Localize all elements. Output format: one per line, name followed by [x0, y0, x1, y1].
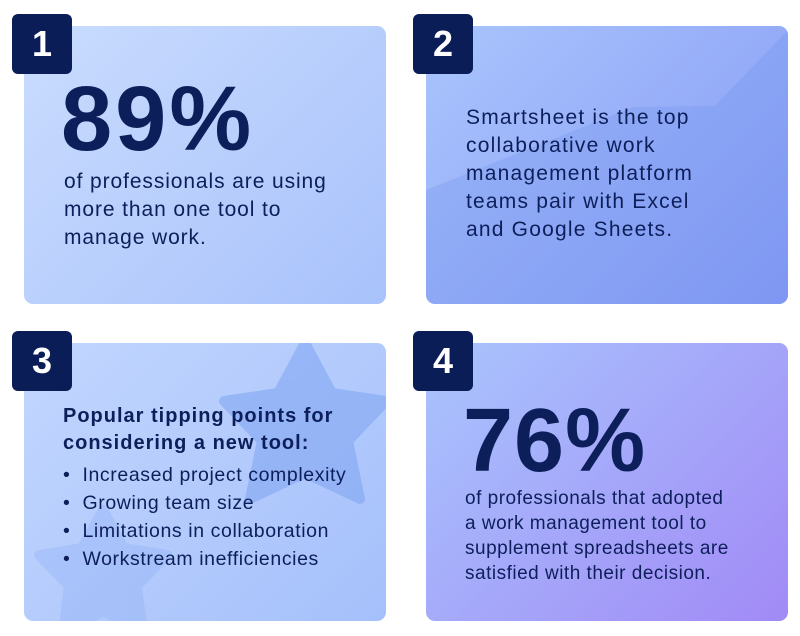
badge 4 [413, 331, 473, 391]
text block 2: teams pair with Excel [466, 190, 690, 213]
text block 1: more than one tool to [64, 198, 281, 221]
big stat 89%: 89% [61, 68, 254, 170]
decorative chart shape [426, 31, 788, 304]
heading 3: considering a new tool: [63, 432, 309, 454]
text block 4: a work management tool to [465, 513, 707, 534]
text block 4: supplement spreadsheets are [465, 538, 729, 559]
badge 4: 4 [433, 340, 453, 381]
text block 1: of professionals are using [64, 170, 327, 193]
text block 2 [466, 106, 693, 241]
badge 3: 3 [32, 340, 52, 381]
big stat 76%: 76% [463, 391, 646, 491]
text block 1 [64, 170, 327, 249]
text block 2: Smartsheet is the top [466, 106, 690, 129]
panel 1 [24, 26, 386, 304]
text block 1: manage work. [64, 226, 207, 249]
badge 2: 2 [433, 23, 453, 64]
heading 3: Popular tipping points for [63, 405, 333, 427]
decorative stars [34, 343, 386, 621]
panel 3 [24, 343, 386, 621]
bullet list: • Workstream inefficiencies [63, 548, 319, 570]
badge 1: 1 [32, 23, 52, 64]
panel 2 [426, 26, 788, 304]
bullet list: • Limitations in collaboration [63, 520, 329, 542]
text block 4 [465, 488, 729, 584]
text block 2: management platform [466, 162, 693, 185]
text block 2: and Google Sheets. [466, 218, 673, 241]
heading 3 [63, 405, 333, 454]
bullet list: • Increased project complexity [63, 464, 346, 486]
bullet list [63, 464, 346, 570]
text block 4: of professionals that adopted [465, 488, 724, 509]
text block 2: collaborative work [466, 134, 656, 157]
panel 4 [426, 343, 788, 621]
badge 1 [12, 14, 72, 74]
badge 2 [413, 14, 473, 74]
text block 4: satisfied with their decision. [465, 563, 711, 584]
bullet list: • Growing team size [63, 492, 254, 514]
badge 3 [12, 331, 72, 391]
